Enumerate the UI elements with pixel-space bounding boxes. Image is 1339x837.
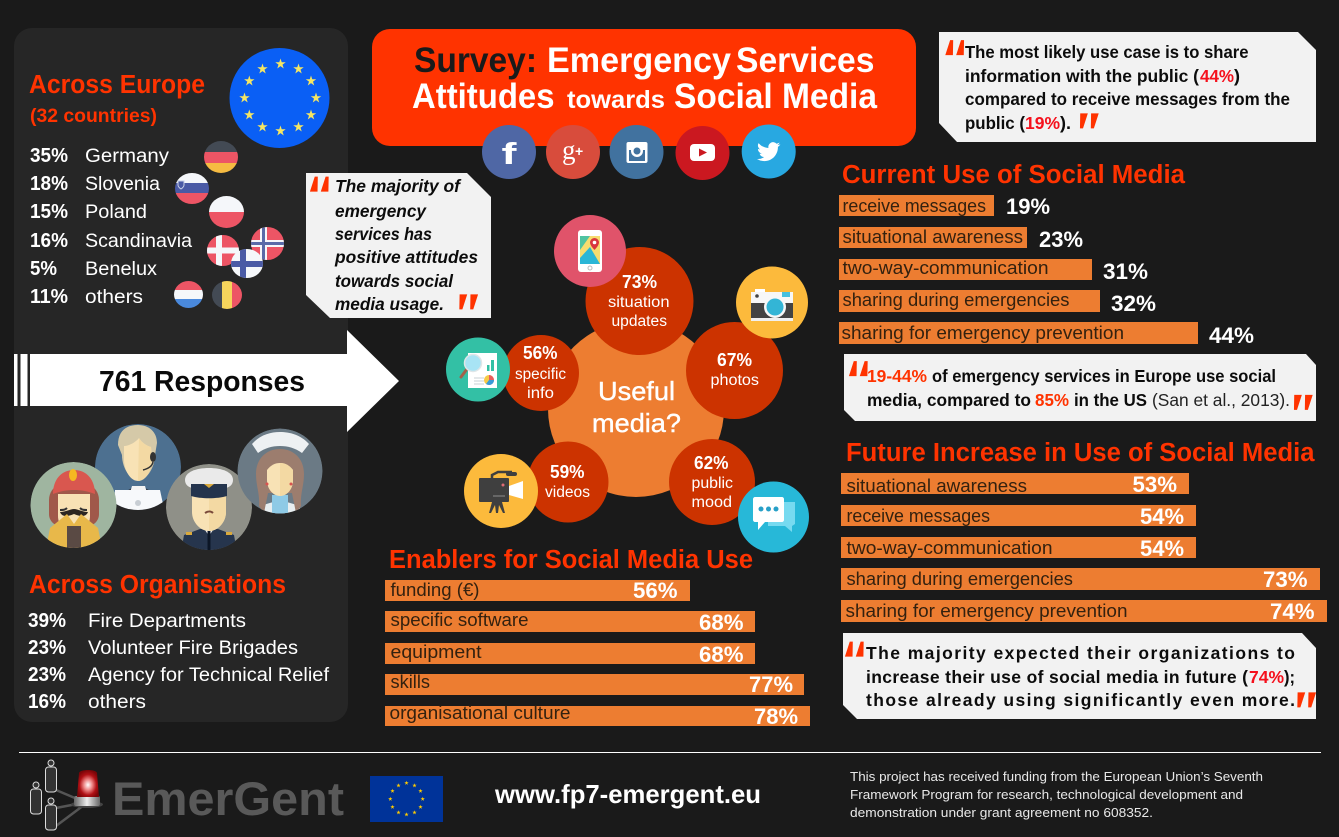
- callout: most likely use case: ).: [1060, 113, 1071, 133]
- bubble: situation updates: situation: [608, 294, 670, 311]
- arrow: 761 Responses: 761 Responses: [99, 366, 305, 398]
- list: share of responses by organisation: [28, 610, 330, 713]
- list: share of responses by country: Poland: [85, 202, 147, 223]
- icon: EU flag: [370, 776, 443, 822]
- bar: sharing during emergencies: [841, 567, 1320, 592]
- title banner: Emergency: [547, 41, 732, 80]
- icon: nurse avatar: [238, 428, 322, 517]
- bar: situational awareness: 23%: [1039, 227, 1083, 252]
- list: share of responses by country: 11%: [30, 286, 68, 308]
- bar: organisational culture: organisational culture: [390, 703, 570, 723]
- bar: sharing for emergency prevention: [839, 322, 1254, 348]
- bubble: photos: [686, 322, 783, 419]
- icon: EU flag circle: [230, 48, 330, 148]
- bar: skills: 77%: [749, 672, 793, 697]
- callout: most likely use case: 44%: [1200, 66, 1234, 86]
- bar: organisational culture: [385, 703, 810, 729]
- bubble: situation updates: [586, 247, 694, 355]
- icon: Facebook: f: [502, 136, 517, 171]
- callout: majority expected increase: increase their use of social media in future (: [866, 667, 1248, 687]
- bar: funding: [385, 578, 690, 603]
- list: share of responses by country: 16%: [30, 230, 68, 252]
- bubble: videos: videos: [545, 484, 590, 501]
- list: share of responses by organisation: 39%: [28, 610, 66, 632]
- title banner: Attitudes: [412, 77, 554, 116]
- bar: specific software: specific software: [390, 610, 528, 630]
- heading: Across Europe: Across Europe: [29, 71, 205, 99]
- hub: Useful media?: media?: [592, 408, 681, 438]
- bar chart: future increase in use of social media: [841, 472, 1327, 624]
- bubble: videos: [528, 442, 608, 522]
- list: share of responses by country: 5%: [30, 258, 57, 280]
- icon: operator avatar: [95, 424, 181, 513]
- list: share of responses by country: 18%: [30, 173, 68, 195]
- bar: sharing for emergency prevention: 74%: [1270, 599, 1314, 624]
- title banner: towards: [567, 86, 665, 114]
- bar: sharing during emergencies: sharing during emergencies: [842, 290, 1070, 310]
- bar: receive messages: receive messages: [842, 196, 986, 216]
- callout: most likely use case: public (: [965, 113, 1025, 133]
- callout: most likely use case: [939, 2, 1316, 166]
- arrow: 761 Responses: [14, 330, 399, 432]
- callout: 19-44% compared to US: media, compared to: [867, 390, 1031, 410]
- website address: www.fp7-emergent.eu: [494, 779, 761, 809]
- bar chart: enablers for social media use: [385, 578, 810, 729]
- icon: flag of Germany: [204, 141, 238, 173]
- callout: 19-44% compared to US: ": [1284, 382, 1316, 448]
- title banner: [372, 29, 916, 146]
- bar: funding: funding (€): [390, 580, 480, 600]
- funding statement: This project has received funding from the European Union’s Seventh: [850, 769, 1263, 784]
- callout: positive attitudes: The majority of: [335, 176, 462, 196]
- heading: Across Europe: [29, 71, 205, 127]
- icon: Google Plus: [546, 125, 600, 179]
- list: share of responses by organisation: 16%: [28, 691, 66, 713]
- funding statement: [850, 769, 1263, 820]
- bubble: videos: 59%: [550, 462, 584, 482]
- callout: most likely use case: The most likely use case is to share: [965, 42, 1249, 62]
- heading: Future Increase in Use of Social Media: Future Increase in Use of Social Media: [846, 439, 1315, 467]
- bar: sharing during emergencies: [839, 290, 1156, 316]
- bar: receive messages: [841, 504, 1196, 529]
- bar: sharing for emergency prevention: sharing for emergency prevention: [842, 323, 1124, 343]
- icon: Facebook: [482, 125, 536, 179]
- list: share of responses by organisation: 23%: [28, 664, 66, 686]
- callout: majority expected increase: 74%: [1249, 667, 1284, 687]
- bar: skills: [385, 672, 804, 697]
- bar: two-way-communication: two-way-communication: [842, 258, 1048, 278]
- icon: Google Plus: g: [562, 135, 576, 165]
- bar: sharing for emergency prevention: [841, 599, 1327, 624]
- icon: analytics report: [446, 338, 510, 402]
- bar: sharing during emergencies: 32%: [1111, 291, 1156, 316]
- bar: receive messages: [839, 194, 1050, 219]
- hub: Useful media?: Useful: [598, 376, 675, 406]
- bar: equipment: 68%: [699, 642, 744, 667]
- heading: Current Use of Social Media: Current Use of Social Media: [842, 161, 1186, 189]
- list: share of responses by organisation: Volunteer Fire Brigades: [88, 638, 298, 659]
- list: share of responses by country: others: [85, 287, 143, 308]
- icon: video camera: [464, 454, 538, 528]
- callout: majority expected increase: ": [842, 604, 874, 670]
- bubble: specific info: [503, 335, 579, 411]
- icon: Google Plus: +: [575, 143, 583, 159]
- bar: equipment: [385, 642, 755, 667]
- bar: specific software: 68%: [699, 610, 744, 635]
- bubble: specific info: info: [527, 385, 554, 402]
- callout: most likely use case: ": [1070, 100, 1102, 166]
- list: share of responses by organisation: Agency for Technical Relief: [88, 665, 330, 686]
- bar: two-way-communication: 54%: [1140, 536, 1184, 561]
- bar: situational awareness: 53%: [1132, 472, 1177, 497]
- list: share of responses by country: 15%: [30, 201, 68, 223]
- callout: 19-44% compared to US: [844, 323, 1316, 448]
- bar: sharing during emergencies: sharing during emergencies: [846, 569, 1073, 589]
- bubble: specific info: specific: [515, 366, 566, 383]
- list: share of responses by country: 35%: [30, 145, 68, 167]
- bar: two-way-communication: two-way-communication: [846, 538, 1052, 558]
- list: share of responses by country: Scandinavia: [85, 231, 192, 252]
- icon: Twitter: [742, 124, 796, 178]
- callout: 19-44% compared to US: ": [846, 323, 878, 389]
- callout: 19-44% compared to US: in the US: [1074, 390, 1147, 410]
- heading: Across Europe: (32 countries): [30, 106, 157, 127]
- bubble: photos: 67%: [717, 350, 752, 370]
- bar chart: current use of social media: [839, 194, 1254, 348]
- callout: positive attitudes: media usage.: [335, 294, 444, 314]
- bar: organisational culture: 78%: [754, 704, 798, 729]
- bubble: situation updates: updates: [612, 313, 667, 330]
- callout: most likely use case: information with the public (: [965, 66, 1199, 86]
- icon: flag of Denmark: [207, 235, 239, 266]
- logo: EmerGent: [30, 760, 344, 830]
- list: share of responses by organisation: Fire Departments: [88, 611, 246, 632]
- callout: most likely use case: compared to receive messages from the: [965, 89, 1290, 109]
- list: share of responses by country: Germany: [85, 146, 170, 167]
- heading: Across Organisations: Across Organisations: [29, 571, 286, 599]
- bar: receive messages: 19%: [1006, 194, 1050, 219]
- callout: most likely use case: ": [942, 2, 974, 68]
- callout: 19-44% compared to US: (San et al., 2013).: [1152, 390, 1290, 410]
- icon: flag of Poland: [209, 196, 244, 228]
- bar: two-way-communication: [839, 258, 1148, 284]
- diagram: useful media bubbles: [446, 215, 809, 552]
- icon: pilot avatar: [166, 464, 252, 552]
- icon: camera: [736, 266, 808, 338]
- bar: skills: skills: [390, 672, 430, 692]
- callout: most likely use case: ): [1234, 66, 1240, 86]
- list: share of responses by organisation: 23%: [28, 637, 66, 659]
- callout: majority expected increase: The majority expected their organizations to: [866, 643, 1295, 663]
- bar: receive messages: receive messages: [846, 506, 990, 526]
- bar: receive messages: 54%: [1140, 504, 1184, 529]
- icon: flag of the Netherlands: [174, 281, 203, 308]
- callout: positive attitudes: ": [307, 138, 339, 204]
- bar: situational awareness: situational awareness: [842, 227, 1023, 247]
- list: share of responses by country: Slovenia: [85, 174, 160, 195]
- title banner: Survey:: [414, 41, 537, 80]
- bar: situational awareness: [839, 227, 1083, 252]
- icon: map on phone: [554, 215, 626, 287]
- bubble: situation updates: 73%: [622, 272, 657, 292]
- title banner: Social Media: [674, 77, 877, 116]
- logo: EmerGent: EmerGent: [112, 772, 344, 825]
- bar: sharing for emergency prevention: sharing for emergency prevention: [846, 601, 1128, 621]
- bubble: specific info: 56%: [523, 343, 558, 363]
- callout: 19-44% compared to US: 19-44%: [867, 366, 927, 386]
- bar: sharing during emergencies: 73%: [1263, 567, 1308, 592]
- callout: 19-44% compared to US: 85%: [1035, 390, 1069, 410]
- bubble: public mood: mood: [692, 494, 732, 511]
- bubble: public mood: public: [692, 475, 733, 492]
- icon: Instagram: [610, 125, 664, 179]
- bar: situational awareness: [841, 472, 1189, 497]
- callout: majority expected increase: [842, 604, 1319, 746]
- callout: positive attitudes: ": [449, 282, 481, 348]
- list: share of responses by country: [30, 145, 192, 308]
- icon: YouTube: [676, 126, 730, 180]
- icon: chat bubbles: [738, 482, 809, 552]
- callout: most likely use case: 19%: [1025, 113, 1060, 133]
- heading: Enablers for Social Media Use: Enablers for Social Media Use: [389, 546, 753, 574]
- bubble: public mood: 62%: [694, 453, 728, 473]
- funding statement: demonstration under grant agreement no 608352.: [850, 805, 1153, 820]
- bar: two-way-communication: [841, 536, 1196, 561]
- title banner: Services: [736, 41, 874, 80]
- hub: Useful media?: [548, 321, 724, 497]
- bar: two-way-communication: 31%: [1103, 259, 1148, 284]
- funding statement: Framework Program for research, technological development and: [850, 787, 1243, 802]
- panel: left column background: [14, 28, 348, 722]
- callout: positive attitudes: positive attitudes: [334, 247, 478, 267]
- callout: positive attitudes: services has: [335, 224, 432, 244]
- icon: flag of Norway: [251, 227, 284, 260]
- callout: positive attitudes: emergency: [335, 201, 427, 221]
- callout: majority expected increase: );: [1284, 667, 1295, 687]
- icon: flag of Belgium: [212, 281, 242, 309]
- bar: situational awareness: situational awareness: [846, 476, 1027, 496]
- callout: positive attitudes: towards social: [335, 271, 454, 291]
- callout: 19-44% compared to US: of emergency services in Europe use social: [932, 366, 1276, 386]
- bar: specific software: [385, 610, 755, 635]
- bar: equipment: equipment: [390, 642, 482, 662]
- list: share of responses by country: Benelux: [85, 259, 158, 280]
- bar: funding: 56%: [633, 578, 678, 603]
- bubble: public mood: [669, 439, 755, 525]
- list: share of responses by organisation: others: [88, 692, 146, 713]
- callout: majority expected increase: ": [1287, 680, 1319, 746]
- icon: firefighter avatar: [30, 462, 116, 550]
- bubble: photos: photos: [710, 372, 759, 389]
- icon: flag of Slovenia: [175, 173, 209, 204]
- callout: positive attitudes: [306, 138, 491, 348]
- icon: flag of Finland: [231, 249, 263, 278]
- bar: sharing for emergency prevention: 44%: [1209, 323, 1254, 348]
- callout: majority expected increase: those already using significantly even more.: [866, 690, 1295, 710]
